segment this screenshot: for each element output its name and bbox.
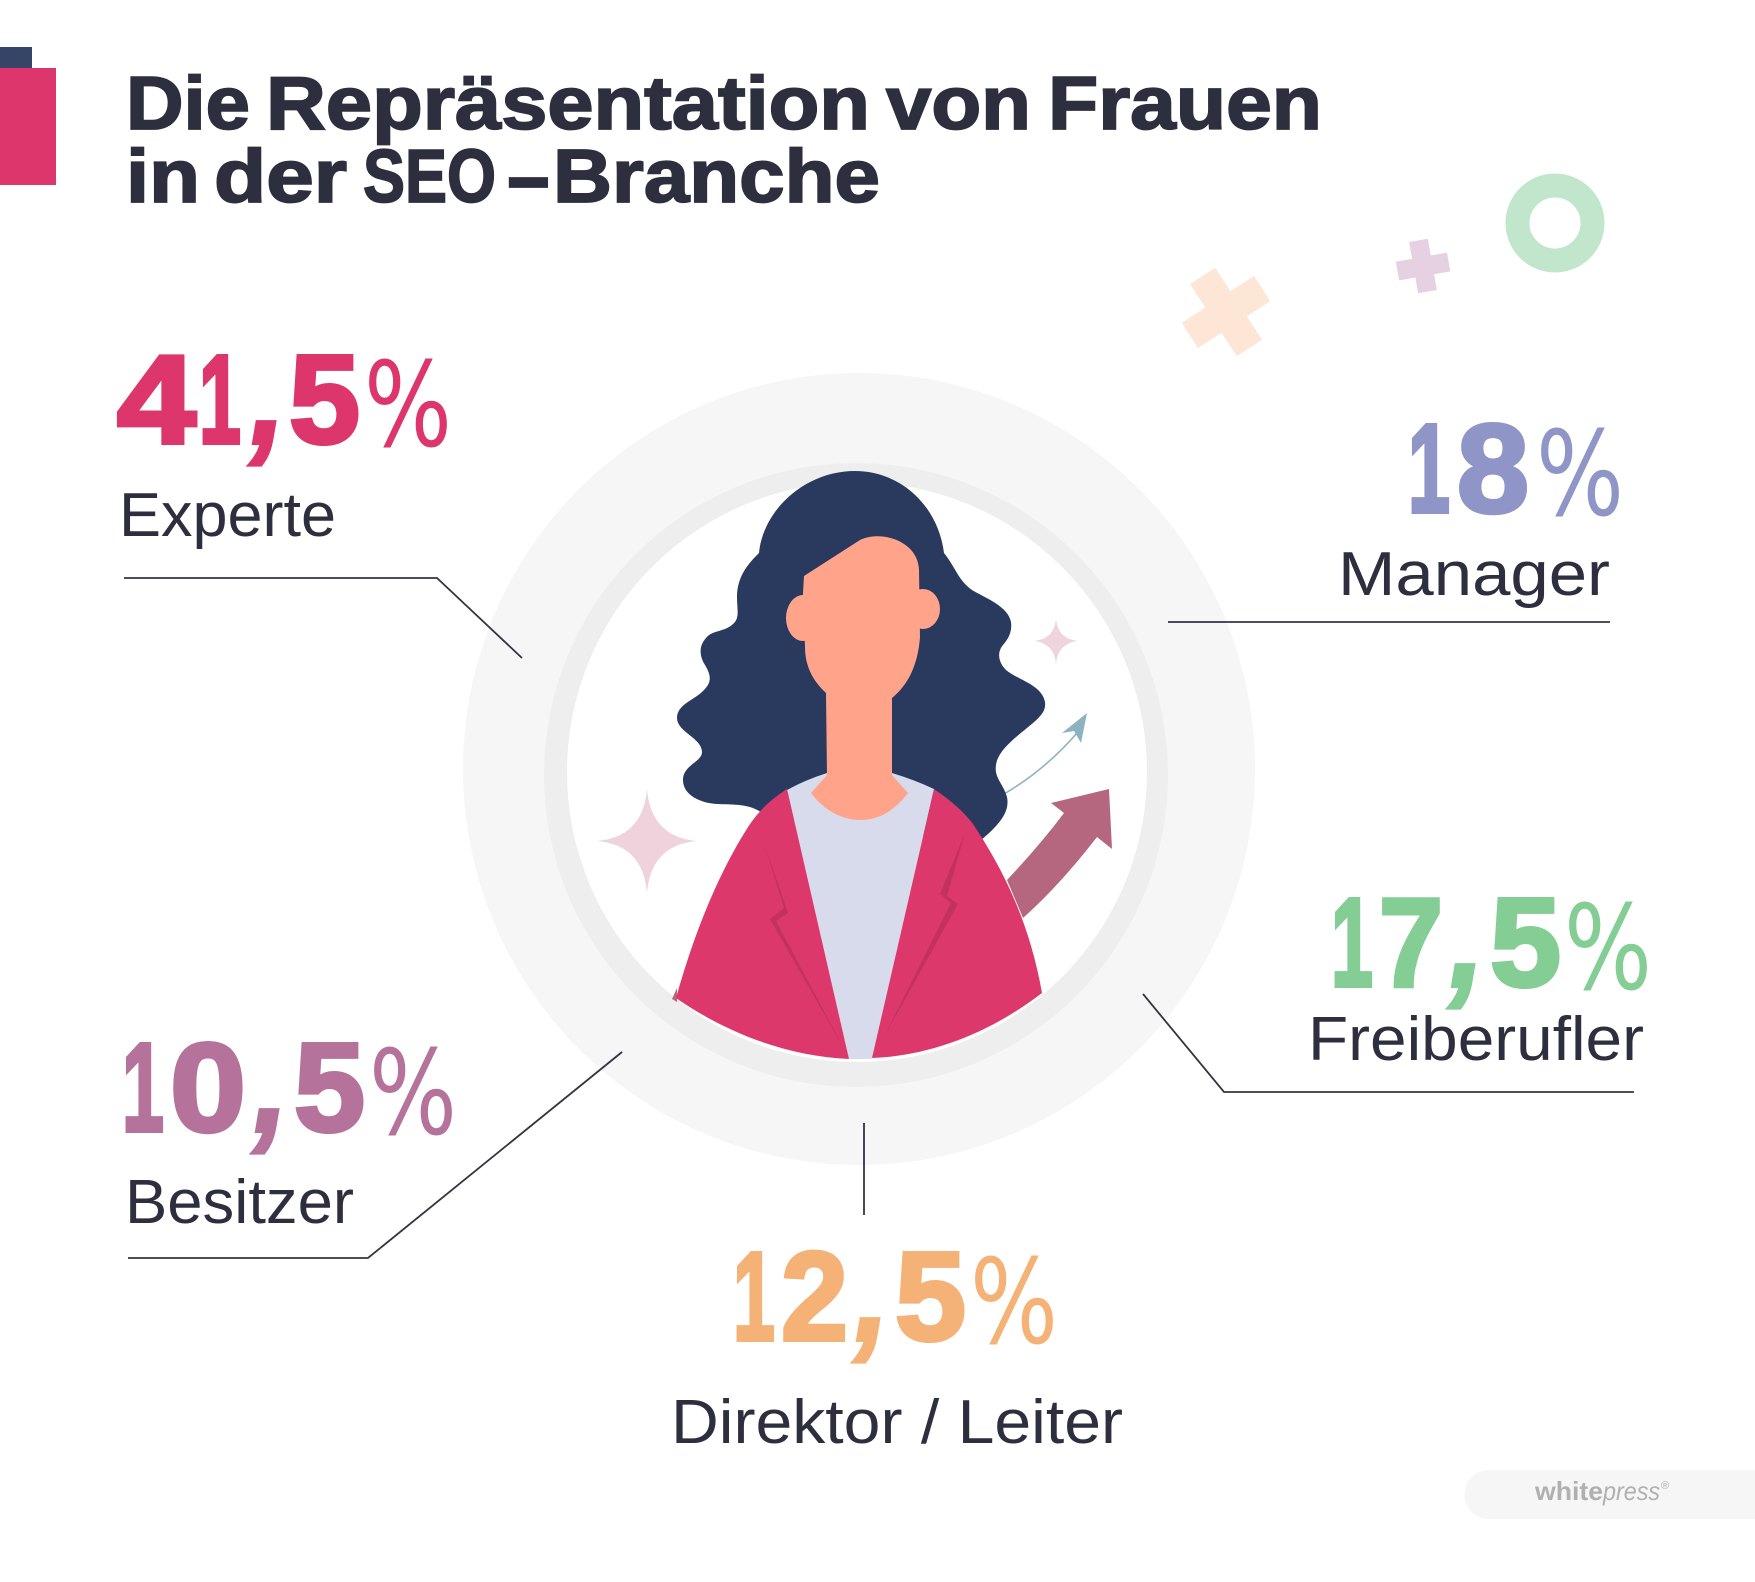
- hair: [677, 471, 1045, 845]
- callout: Freiberufler: ,: [1448, 859, 1484, 1016]
- callout: Direktor / Leiter: ,: [853, 1213, 889, 1370]
- arrow: small teal: [1004, 713, 1087, 794]
- callout: Freiberufler: 7: [1379, 872, 1443, 1013]
- title: -: [505, 134, 552, 218]
- icon: sparkle large: [597, 789, 697, 893]
- head and neck: [786, 536, 940, 820]
- jacket right: [872, 789, 1042, 1058]
- callout: Manager: [1168, 398, 1624, 622]
- decorative shapes: [1182, 186, 1592, 356]
- title: [126, 61, 1322, 218]
- callout: Experte: 5: [289, 329, 360, 470]
- callout: Besitzer: 5: [294, 1017, 365, 1158]
- callout: Besitzer: 0: [170, 1017, 246, 1158]
- callout: Direktor / Leiter: 1: [733, 1226, 775, 1367]
- title: Die: [126, 61, 250, 145]
- callout: Direktor / Leiter: 2: [781, 1226, 848, 1367]
- callout: Besitzer: ,: [252, 1004, 288, 1161]
- callout: Manager: 8: [1457, 398, 1529, 539]
- callout: Freiberufler: [1143, 859, 1652, 1092]
- title: in: [126, 134, 200, 218]
- callout: Besitzer: %: [369, 1024, 457, 1162]
- callout: Experte: Experte: [119, 481, 336, 550]
- callout: Freiberufler: 1: [1331, 872, 1373, 1013]
- concentric background circles: [463, 373, 1255, 1165]
- icon: sparkle small: [1034, 619, 1078, 664]
- callout: Direktor / Leiter: 5: [895, 1226, 966, 1367]
- callout: Freiberufler: %: [1564, 879, 1652, 1017]
- logo: whitepress: white: [1534, 1476, 1603, 1506]
- title: der: [214, 134, 347, 218]
- callout: Besitzer: Besitzer: [125, 1168, 354, 1237]
- callout: Manager: %: [1536, 405, 1624, 543]
- shirt: [787, 773, 934, 1059]
- callout: Experte: ,: [249, 316, 285, 473]
- callout: Besitzer: 1: [122, 1017, 164, 1158]
- title: Repräsentation: [266, 61, 870, 145]
- callout: Direktor / Leiter: [671, 1123, 1123, 1457]
- lapel shadows: [764, 833, 965, 1047]
- arrow: big mauve: [1007, 789, 1112, 918]
- callout: Experte: 4: [117, 329, 196, 470]
- callout: Experte: %: [364, 336, 452, 474]
- callout: Experte: 1: [199, 329, 241, 470]
- logo: whitepress: press: [1602, 1476, 1660, 1506]
- title: von: [886, 61, 1031, 145]
- callout: Besitzer: [122, 1004, 622, 1258]
- title: Frauen: [1048, 61, 1322, 145]
- callout: Manager: 1: [1408, 398, 1450, 539]
- callout: Freiberufler: 5: [1490, 872, 1561, 1013]
- illustration: woman with rising arrows: [597, 471, 1112, 1059]
- callout: Freiberufler: Freiberufler: [1308, 1005, 1644, 1074]
- logo: whitepress: ®: [1661, 1480, 1669, 1492]
- logo: whitepress: [1464, 1470, 1755, 1519]
- callout: Direktor / Leiter: Direktor / Leiter: [671, 1388, 1123, 1457]
- callout: Experte: [117, 316, 522, 658]
- callout: Manager: Manager: [1338, 540, 1610, 609]
- jacket left: [672, 789, 849, 1059]
- title: SEO: [363, 134, 496, 218]
- title: Branche: [553, 134, 880, 218]
- corner accent blocks: [0, 47, 56, 185]
- callout: Direktor / Leiter: %: [970, 1233, 1058, 1371]
